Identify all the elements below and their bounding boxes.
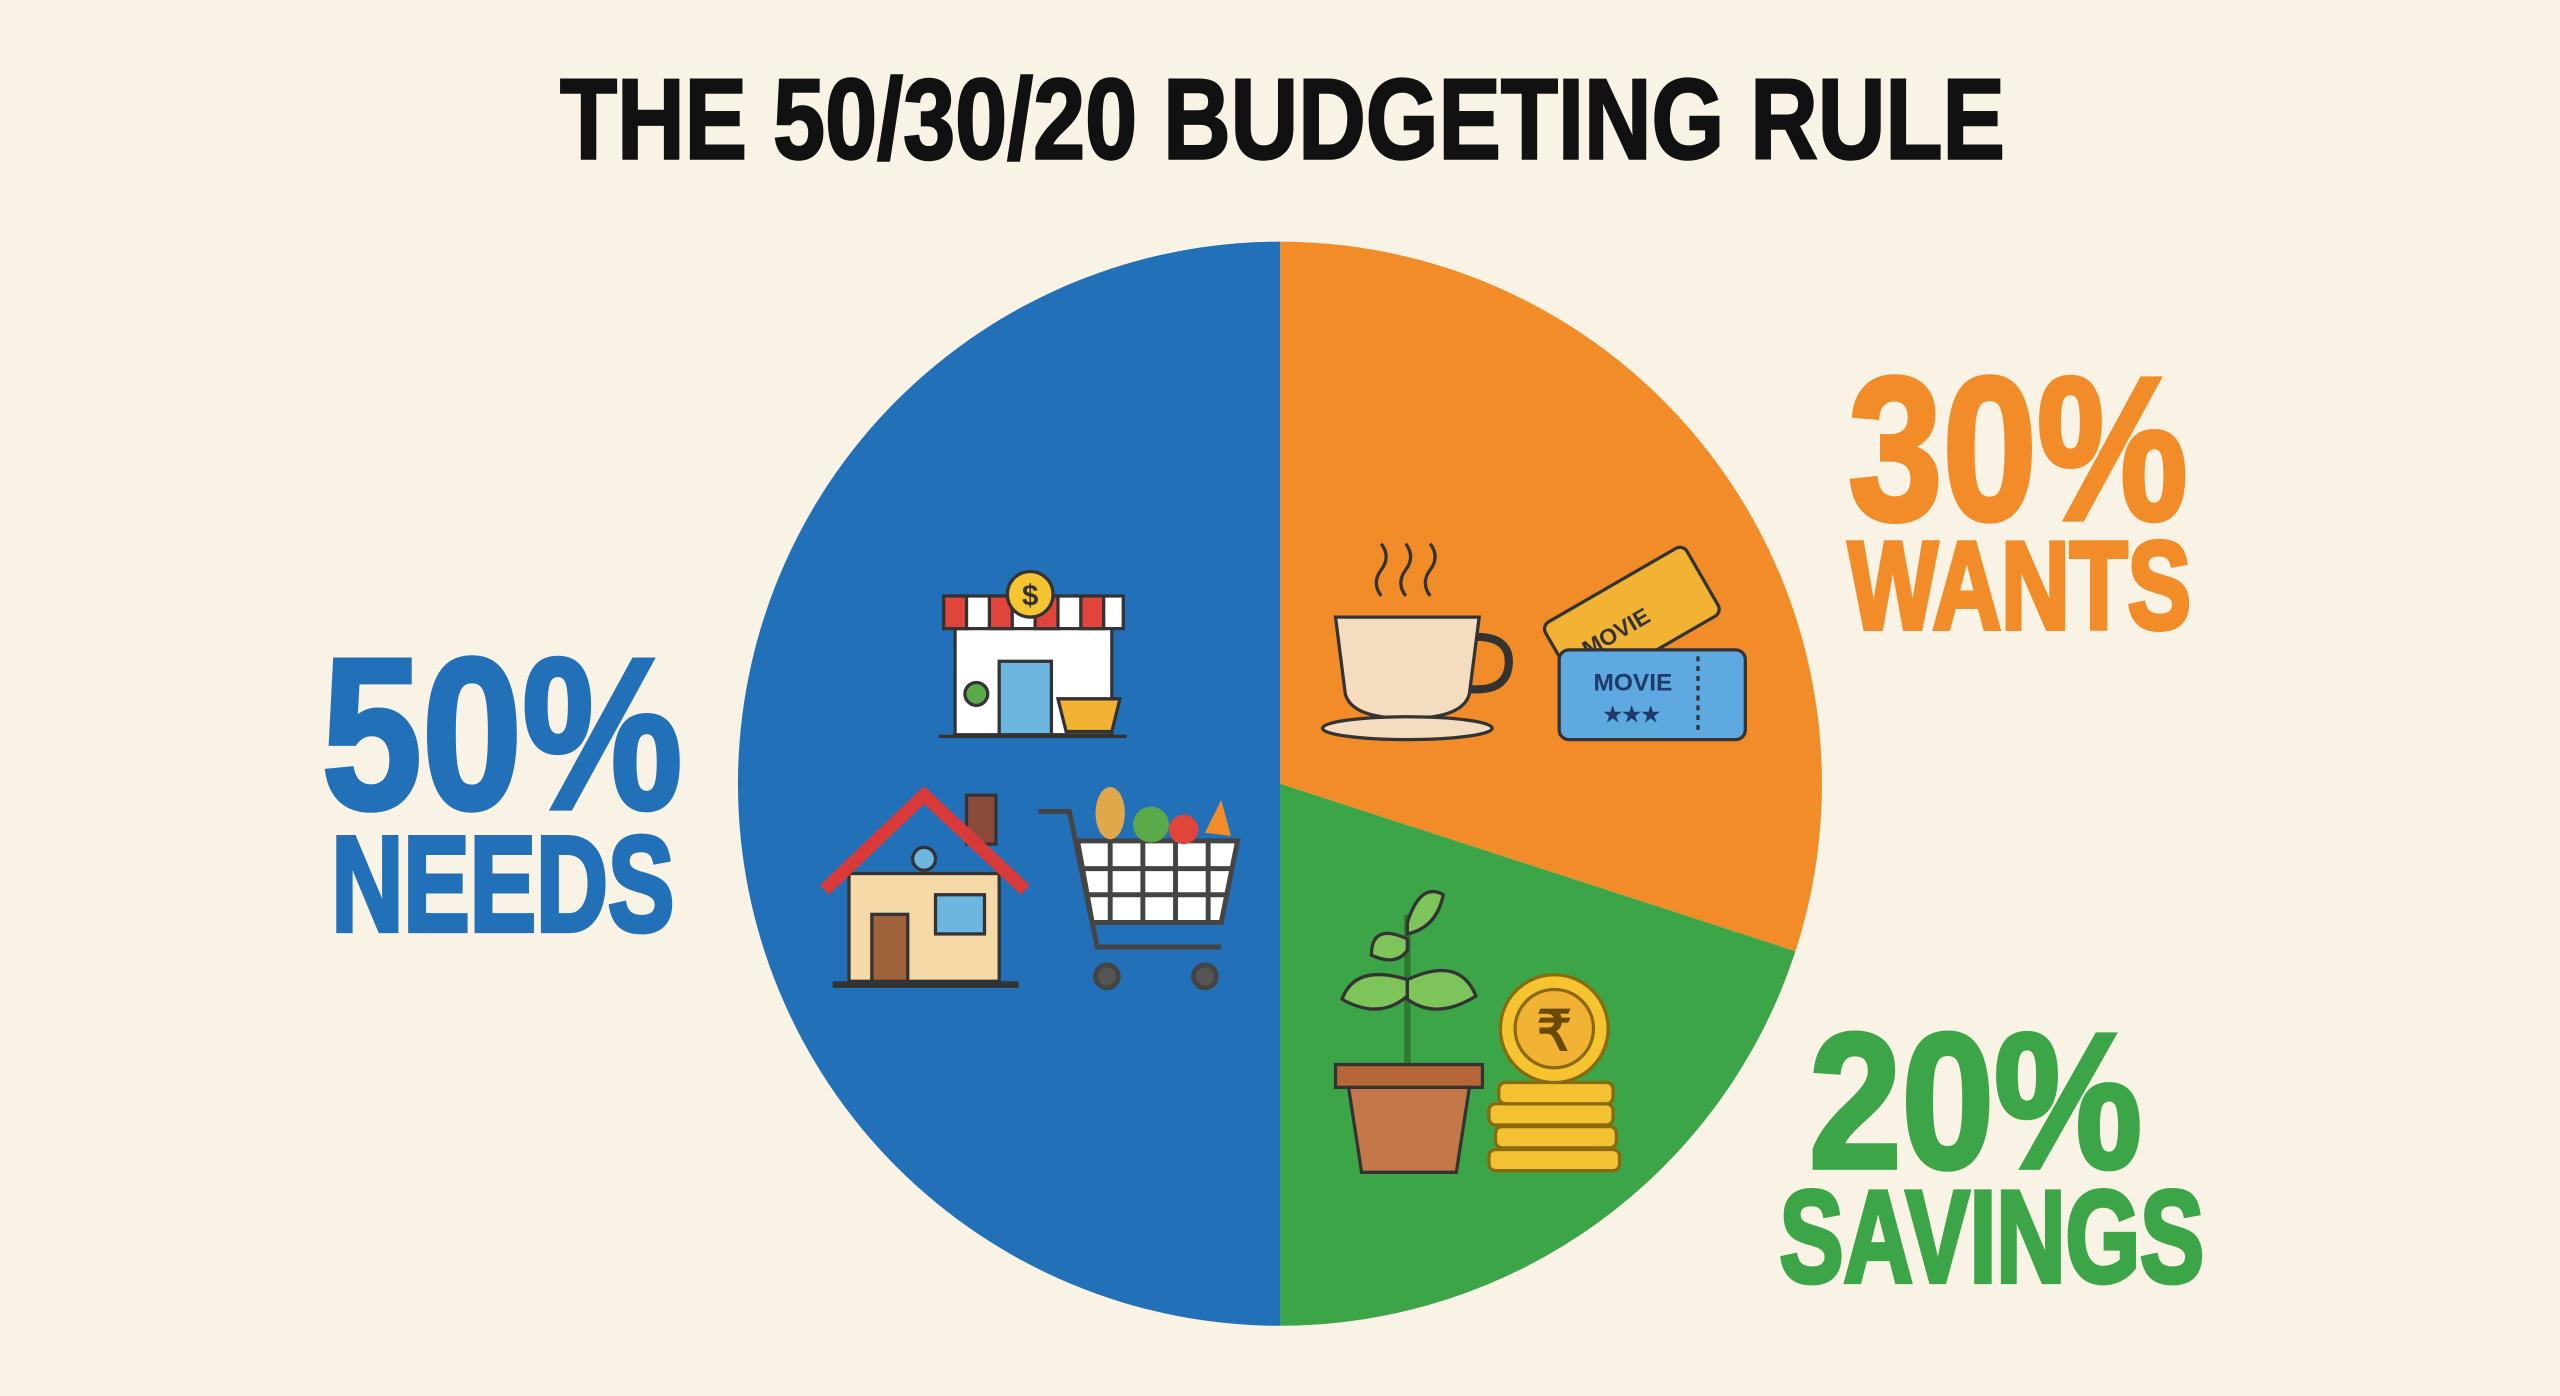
icon: shopping cart: [1038, 787, 1238, 988]
label: 20% savings: [1780, 993, 2204, 1310]
label: 30% wants: [1848, 335, 2191, 656]
icon: movie tickets: ★★★: [1603, 704, 1660, 727]
label: 20% savings: SAVINGS: [1780, 1164, 2204, 1310]
label: 50% needs: NEEDS: [331, 808, 674, 960]
icon: store: $: [1022, 580, 1038, 613]
slice: needs: [738, 242, 1280, 1326]
icon: movie tickets: MOVIE: [1578, 603, 1654, 662]
icon: store: [939, 571, 1127, 736]
title: THE 50/30/20 BUDGETING RULE: [560, 56, 2005, 183]
label: 30% wants: WANTS: [1848, 518, 2191, 656]
label: 20% savings: 20%: [1809, 993, 2142, 1208]
icon: rupee coins: [1489, 975, 1620, 1171]
icon: plant in pot: [1336, 892, 1482, 1172]
icon: house: [824, 795, 1025, 985]
icon: movie tickets: [1542, 544, 1745, 740]
icon: movie tickets: MOVIE: [1593, 670, 1672, 697]
pie chart: [738, 242, 1822, 1326]
label: 30% wants: 30%: [1848, 335, 2188, 563]
slice: savings: [1280, 784, 1795, 1326]
label: 50% needs: [322, 613, 682, 960]
slice: wants: [1280, 242, 1822, 951]
label: 50% needs: 50%: [322, 613, 682, 854]
icon: coffee cup: [1322, 544, 1509, 740]
icon: rupee coins: ₹: [1537, 1000, 1572, 1062]
